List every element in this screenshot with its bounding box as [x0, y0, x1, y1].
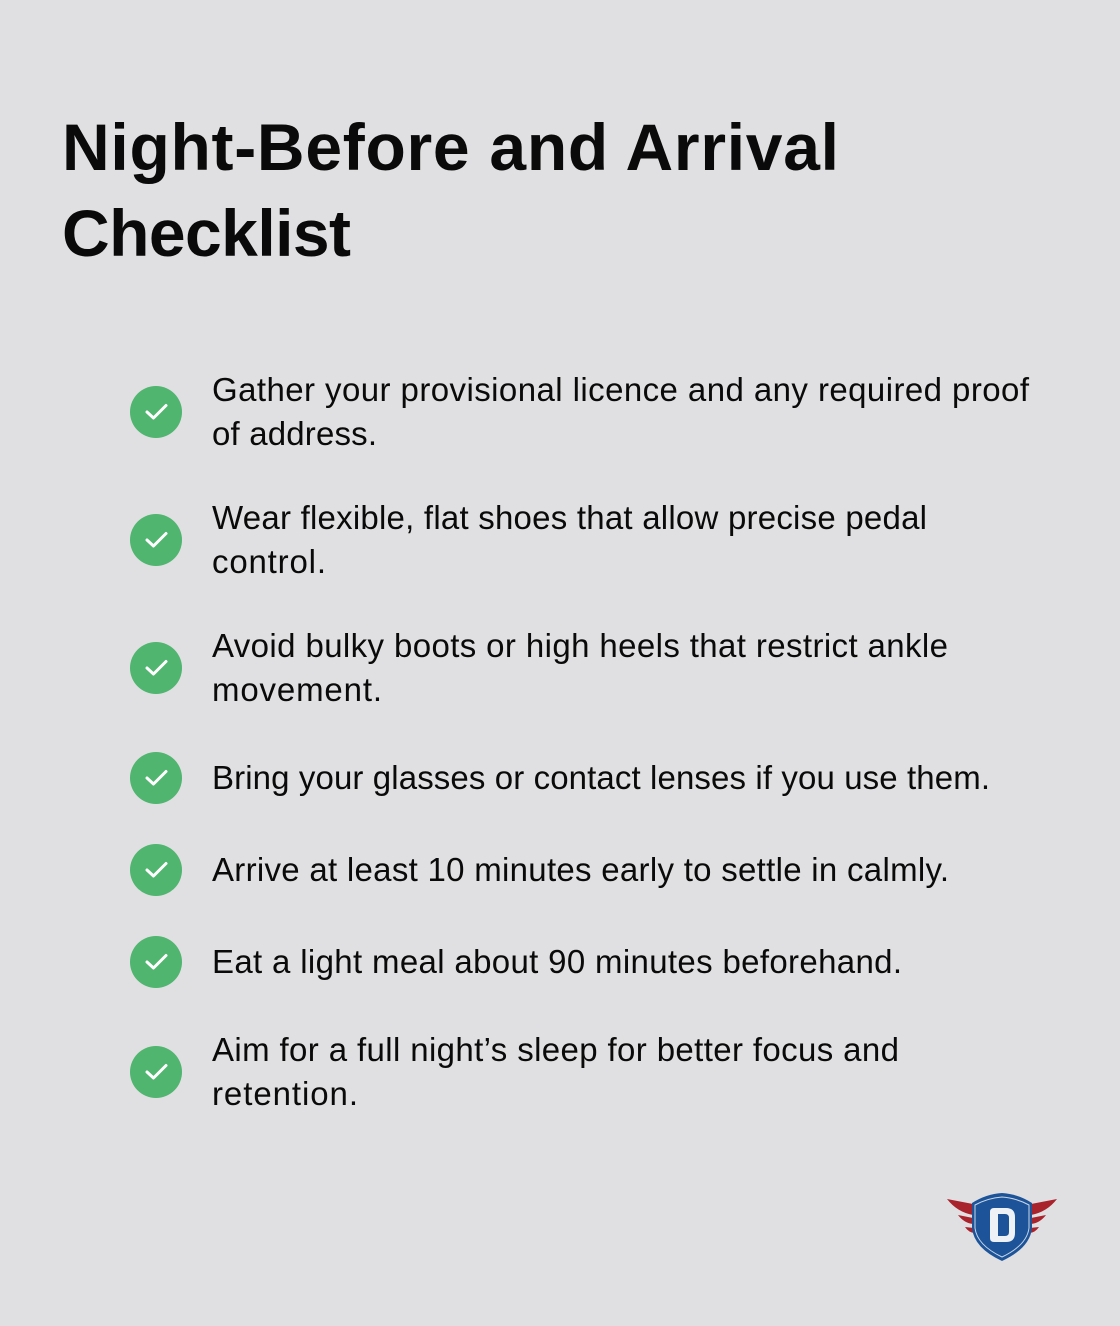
item: full night's sleep — [130, 1031, 899, 1112]
item: avoid bulky boots — [130, 627, 948, 708]
item: flat shoes: control. — [212, 543, 326, 580]
checklist — [130, 371, 1030, 1112]
item: glasses or contact lenses — [130, 752, 990, 804]
item: full night's sleep: retention. — [212, 1075, 358, 1112]
title: Checklist — [62, 196, 351, 270]
item: flat shoes — [130, 499, 927, 580]
item: arrive early: Arrive at least 10 minutes early to settle in calmly. — [212, 851, 949, 888]
item: light meal — [130, 936, 902, 988]
item: licence and proof of address — [130, 371, 1030, 452]
item: licence and proof of address: Gather your provisional licence and any required proof — [212, 371, 1030, 408]
title: Night-Before and Arrival — [62, 110, 839, 184]
item: licence and proof of address: of address. — [212, 415, 377, 452]
item: avoid bulky boots: movement. — [212, 671, 382, 708]
item: glasses or contact lenses: Bring your glasses or contact lenses if you use them. — [212, 759, 990, 796]
item: flat shoes: Wear flexible, flat shoes that allow precise pedal — [212, 499, 927, 536]
icon: winged shield logo — [947, 1193, 1057, 1261]
item: full night's sleep: Aim for a full night’s sleep for better focus and — [212, 1031, 899, 1068]
item: arrive early — [130, 844, 949, 896]
title — [62, 110, 839, 270]
item: avoid bulky boots: Avoid bulky boots or high heels that restrict ankle — [212, 627, 948, 664]
item: light meal: Eat a light meal about 90 minutes beforehand. — [212, 943, 902, 980]
